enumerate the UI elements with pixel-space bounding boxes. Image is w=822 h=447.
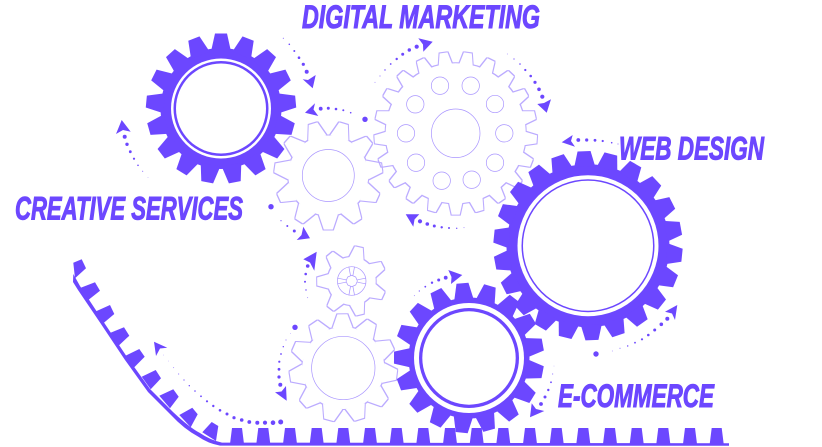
- gear: large outline gear with holes: [374, 52, 537, 215]
- arrow: below web design gear: [593, 305, 677, 357]
- gear: small outline gear with spoked hub: [317, 246, 386, 316]
- arrow: toward web design gear top: [562, 135, 618, 147]
- arrow: below medium outline gear: [268, 204, 310, 240]
- arrow: beside small outline gear: [303, 252, 317, 298]
- arrow: e-commerce: [530, 366, 554, 417]
- heading: creative services: CREATIVE SERVICES: [15, 191, 243, 227]
- arrow: under large outline gear: [406, 214, 464, 229]
- gear: solid gear creative services: [145, 34, 297, 184]
- arrow: above curved rack: [154, 342, 283, 425]
- toothed rack along the bottom: [73, 259, 729, 446]
- heading: digital marketing: DIGITAL MARKETING: [302, 0, 540, 35]
- arrow: over large outline gear: [375, 38, 433, 83]
- arrow: digital marketing right: [507, 54, 551, 113]
- arrow: outline gear to top-left gear: [305, 103, 368, 122]
- heading: web design: WEB DESIGN: [619, 131, 765, 167]
- gear: medium outline gear lower: [289, 314, 398, 422]
- gear: medium outline gear upper: [273, 121, 383, 230]
- arrow: top-left gear to digital marketing: [283, 38, 316, 88]
- heading: e-commerce: E-COMMERCE: [558, 378, 715, 414]
- arrow: creative services upward: [116, 120, 148, 178]
- gear: solid gear web design: [493, 151, 683, 341]
- arrow: left of lower outline gear: [275, 325, 298, 401]
- gear: solid gear e-commerce: [394, 282, 545, 434]
- arrow: over e-commerce gear: [414, 270, 462, 296]
